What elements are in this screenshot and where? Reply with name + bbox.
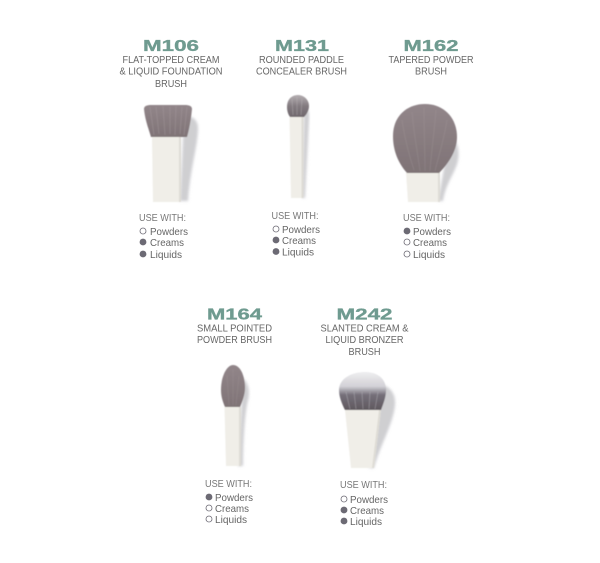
description: M106 [120, 55, 222, 90]
usage list: M242: Creams [350, 506, 384, 517]
brush block: M242 [320, 306, 409, 528]
usage list: M242 [341, 495, 388, 528]
usage list: M164 [206, 493, 253, 526]
usage list: M131: Creams [282, 236, 316, 247]
usage list: M131: Powders [282, 225, 320, 236]
usage list: M131: Liquids [282, 247, 314, 258]
description: M131 [256, 55, 347, 77]
usage list: M164: Liquids [215, 515, 247, 526]
usage list: M164: Powders [215, 493, 253, 504]
usage list: M162: Creams [413, 238, 447, 249]
use with label: M106: USE WITH: [139, 213, 186, 224]
description: M162: TAPERED POWDER [388, 55, 474, 66]
usage list: M242: Powders [350, 495, 388, 506]
title: M106: M106 [143, 38, 200, 55]
description: M242 [320, 323, 409, 358]
title: M242: M242 [336, 306, 392, 324]
title: M131: M131 [275, 38, 330, 55]
icon: small pointed powder brush [221, 365, 249, 466]
description: M162 [388, 55, 474, 77]
use with label: M164: USE WITH: [205, 479, 252, 490]
description: M106: & LIQUID FOUNDATION [120, 66, 222, 77]
description: M242: SLANTED CREAM & [320, 323, 409, 334]
title: M164: M164 [207, 306, 263, 324]
usage list: M242: Liquids [350, 517, 382, 528]
description: M106: FLAT-TOPPED CREAM [122, 55, 220, 66]
brush block: M131 [256, 38, 347, 258]
use with label: M131: USE WITH: [272, 211, 318, 222]
usage list: M162 [404, 227, 451, 261]
usage list: M106: Liquids [150, 250, 182, 261]
description: M131: CONCEALER BRUSH [256, 66, 347, 77]
description: M131: ROUNDED PADDLE [259, 55, 344, 66]
usage list: M106: Powders [150, 227, 188, 238]
icon: tapered powder brush [393, 104, 459, 202]
usage list: M106: Creams [150, 238, 184, 249]
description: M242: LIQUID BRONZER [326, 335, 404, 346]
title: M162: M162 [404, 38, 458, 55]
brush block: M106 [120, 38, 222, 261]
description: M164: SMALL POINTED [197, 323, 272, 334]
brush block: M164 [197, 306, 272, 526]
usage list: M162: Liquids [413, 250, 445, 261]
description: M106: BRUSH [155, 79, 187, 90]
description: M242: BRUSH [348, 347, 380, 358]
icon: flat-topped foundation brush [144, 105, 198, 202]
description: M164 [197, 323, 272, 346]
icon: slanted cream and liquid bronzer brush [339, 372, 395, 468]
description: M164: POWDER BRUSH [197, 335, 272, 346]
use with label: M162: USE WITH: [403, 213, 450, 224]
brush block: M162 [388, 38, 474, 261]
usage list: M162: Powders [413, 227, 451, 238]
description: M162: BRUSH [415, 66, 447, 77]
usage list: M131 [273, 225, 320, 258]
usage list: M106 [140, 227, 188, 261]
use with label: M242: USE WITH: [340, 480, 387, 491]
icon: rounded paddle concealer brush [287, 95, 309, 198]
usage list: M164: Creams [215, 504, 249, 515]
